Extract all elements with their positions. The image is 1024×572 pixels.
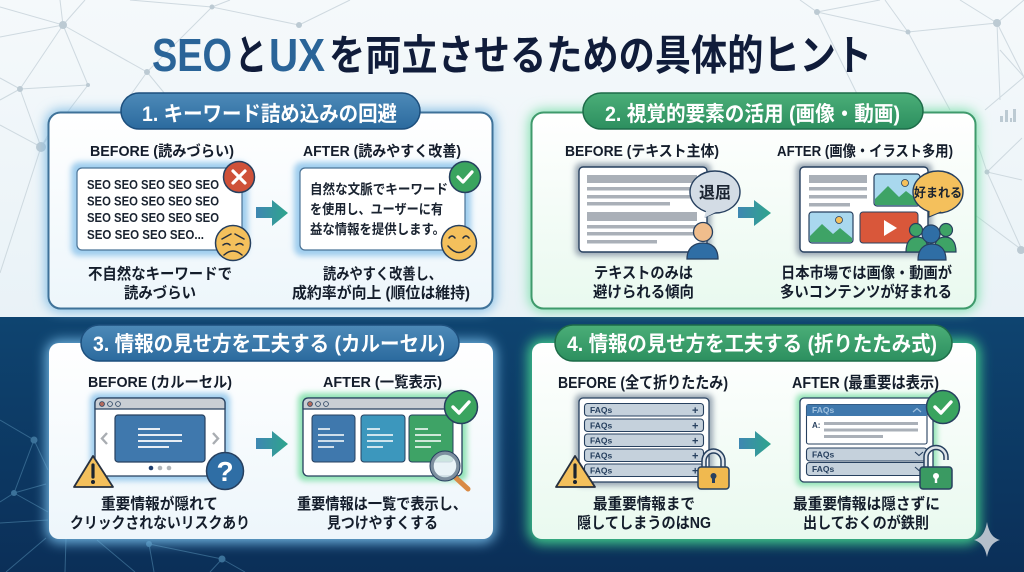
arrow [738,200,771,226]
collapsed FAQ document: + [692,405,698,417]
heading pill 4 [555,325,952,361]
before caption [593,265,694,301]
after caption: 日本市場では画像・動画が [781,263,952,282]
after label: AFTER (最重要は表示) [792,374,939,392]
image-rich document [796,163,932,256]
panel 4: accordion [528,325,980,544]
before caption: 読みづらい [124,284,196,302]
icon: question mark: ? [216,456,234,487]
after caption [297,494,467,532]
collapsed FAQ document: FAQs [590,466,612,476]
speech bubble: liked [913,171,963,217]
icon: open padlock [920,448,952,489]
arrow [256,431,288,457]
icon: red cross [224,162,254,192]
icon: warning triangle [556,456,595,487]
before caption: 不自然なキーワードで [88,264,232,283]
after text box: 益な情報を提供します。 [310,221,445,237]
after caption: 成約率が向上 (順位は維持) [292,283,470,302]
after text box: 自然な文脈でキーワード [310,181,448,197]
before text box: SEO SEO SEO SEO SEO [87,211,219,225]
icon: person [687,222,718,259]
icon: green check [450,162,480,192]
icon: small bar chart [1000,109,1016,122]
panel 2: visual elements [529,93,978,311]
icon: happy face [442,226,476,260]
before text box: SEO SEO SEO SEO SEO [87,194,219,208]
icon: green check [926,390,960,424]
after text box [294,162,471,256]
after caption: 出しておくのが鉄則 [803,513,929,532]
list browser window [298,393,467,481]
heading pill 2 [583,93,923,129]
speech bubble: liked: 好まれる [914,185,962,200]
icon: group of people [906,224,956,260]
icon: closed padlock [698,451,729,489]
title: を両立させるための具体的ヒント [329,32,872,79]
before caption [70,494,250,532]
title: UX [269,29,325,81]
before caption: 避けられる傾向 [593,283,694,301]
after label: AFTER (一覧表示) [323,373,442,391]
before text box: SEO SEO SEO SEO SEO [87,178,219,192]
arrow [256,200,288,226]
heading pill 3: 3. 情報の見せ方を工夫する (カルーセル) [93,333,445,356]
after caption [780,263,952,301]
expanded FAQ document: FAQs [812,450,834,460]
after caption [793,494,940,532]
collapsed FAQ document: + [692,436,698,448]
after caption: 重要情報は一覧で表示し、 [297,494,467,513]
speech bubble: bored: 退屈 [699,184,731,202]
heading pill 2: 2. 視覚的要素の活用 (画像・動画) [605,103,900,126]
collapsed FAQ document: FAQs [590,436,612,446]
speech bubble: bored [690,171,740,218]
after label: AFTER (画像・イラスト多用) [777,142,953,160]
panel 3: carousel [46,325,496,543]
collapsed FAQ document: FAQs [590,450,612,460]
before caption: 隠してしまうのはNG [577,514,711,532]
before caption [577,494,711,532]
collapsed FAQ document: FAQs [590,405,612,415]
before label: BEFORE (テキスト主体) [565,142,719,160]
before caption: テキストのみは [594,265,693,282]
text-only document [575,163,711,256]
video thumbnail [860,212,918,243]
after caption: 見つけやすくする [327,514,438,532]
after caption: 最重要情報は隠さずに [793,494,940,513]
before text box [71,162,248,256]
icon: question mark [206,452,244,490]
after caption [292,265,470,302]
panel 1: keyword stuffing [46,93,495,311]
carousel browser window [90,393,230,481]
after text box: を使用し、ユーザーに有 [310,201,443,217]
collapsed FAQ document: + [692,450,698,462]
before caption: 最重要情報まで [593,494,695,513]
image thumbnail top [874,174,920,206]
icon: sad face [216,226,250,260]
before text box: SEO SEO SEO SEO... [87,228,204,242]
heading pill 3 [81,325,459,361]
before label: BEFORE (カルーセル) [88,374,232,391]
heading pill 4: 4. 情報の見せ方を工夫する (折りたたみ式) [567,333,937,356]
expanded FAQ document: FAQs [812,405,834,415]
title [152,29,872,81]
title: SEO [152,29,232,81]
after caption: 読みやすく改善し、 [323,265,442,283]
collapsed FAQ document: FAQs [590,420,612,430]
icon: green check [444,390,478,424]
icon: warning triangle [74,456,113,487]
collapsed FAQ document: + [692,420,698,432]
after label: AFTER (読みやすく改善) [303,142,461,160]
after caption: 多いコンテンツが好まれる [780,282,952,301]
expanded FAQ document: FAQs [812,464,834,474]
image thumbnail bottom [809,212,853,243]
before caption: クリックされないリスクあり [70,514,250,532]
before label: BEFORE (読みづらい) [90,142,234,160]
arrow [739,431,771,457]
icon: sparkle [974,522,1000,557]
title: と [235,32,267,79]
before label: BEFORE (全て折りたたみ) [558,373,728,392]
heading pill 1: 1. キーワード詰め込みの回避 [142,103,397,126]
collapsed FAQ document [575,394,713,486]
expanded FAQ document [796,394,937,486]
icon: magnifier [430,451,468,489]
heading pill 1 [121,93,420,129]
before caption [88,264,232,302]
collapsed FAQ document: + [692,466,698,478]
expanded FAQ document: A: [812,421,820,430]
before caption: 重要情報が隠れて [101,494,218,513]
